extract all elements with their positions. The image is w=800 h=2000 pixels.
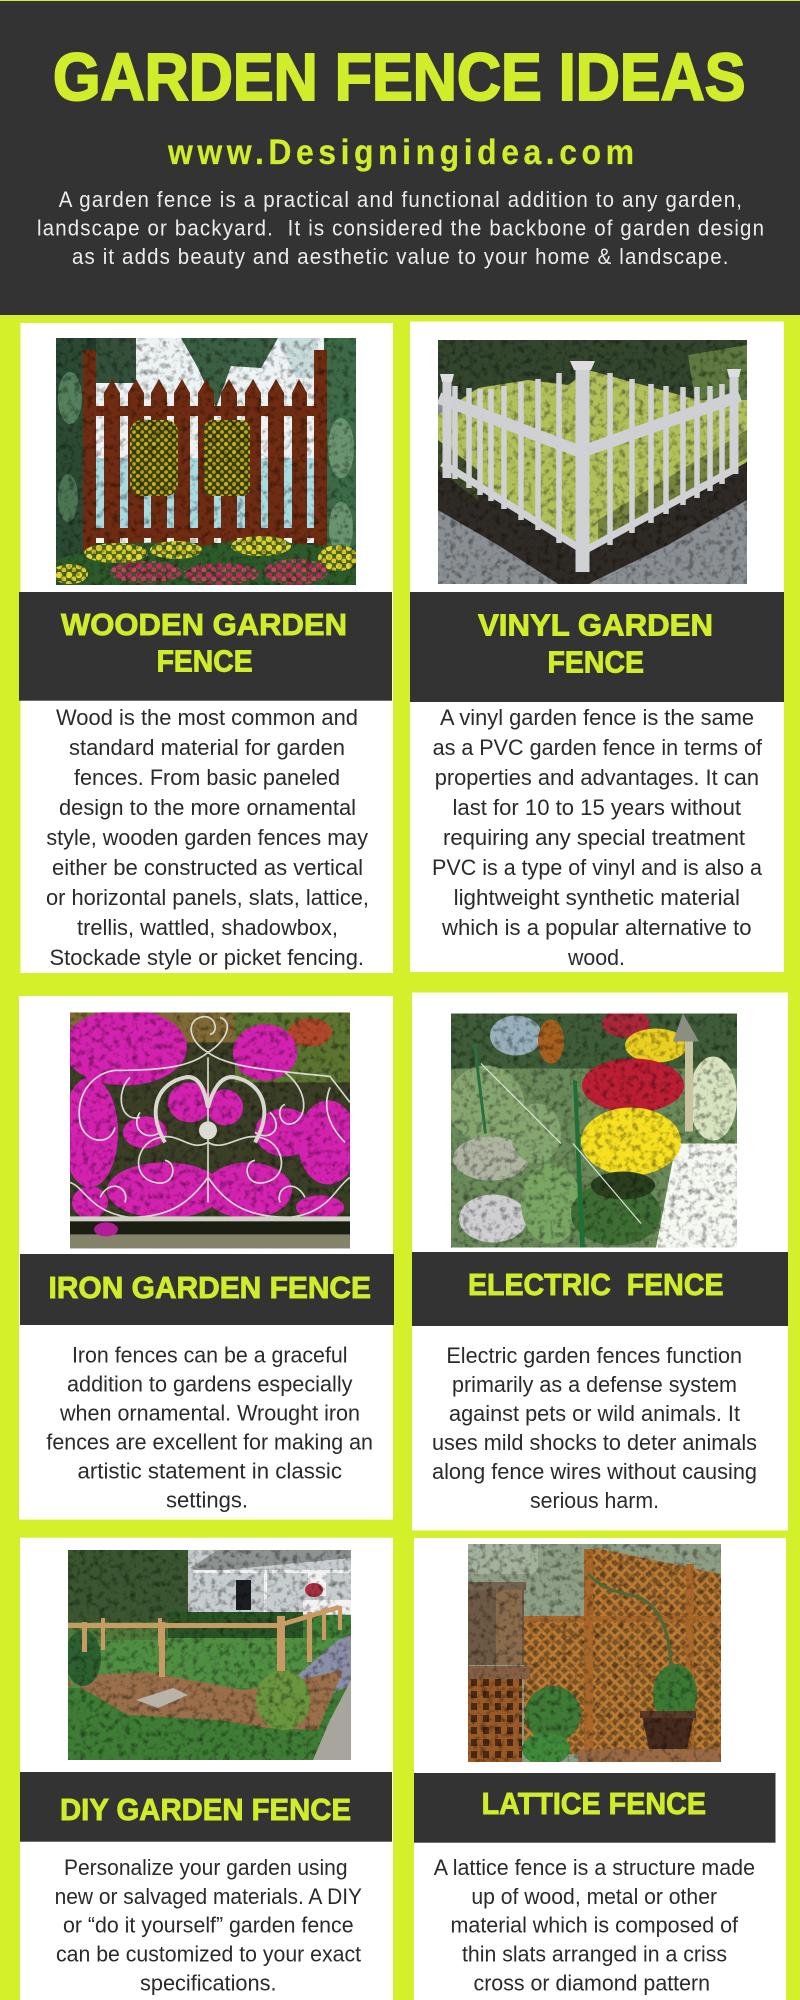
description: up of wood, metal or other [471,1884,717,1909]
description: serious harm. [530,1488,659,1513]
description: either be constructed as vertical [52,855,363,880]
description [55,1855,362,1996]
heading band: FENCE [548,644,644,679]
heading band [20,1254,394,1325]
heading band: FENCE [157,644,253,679]
description: A vinyl garden fence is the same [440,705,754,730]
description: trellis, wattled, shadowbox, [77,915,338,940]
photo: wooden picket fence [56,338,356,585]
photo: white vinyl corner fence [438,340,747,584]
photo: electric fence in flower garden [451,1014,737,1248]
description: requiring any special treatment [443,825,745,850]
description: or “do it yourself” garden fence [63,1913,354,1938]
heading band: VINYL GARDEN [478,608,713,643]
description: new or salvaged materials. A DIY [55,1884,362,1909]
description: cross or diamond pattern [474,1971,710,1996]
heading band: LATTICE FENCE [482,1786,706,1821]
website url: www.Designingidea.com [167,132,634,172]
description: Personalize your garden using [64,1855,348,1880]
description: uses mild shocks to deter animals [432,1430,757,1455]
description: design to the more ornamental [59,795,356,820]
photo: diy post and rail fence [68,1550,351,1760]
panel: electric fence [412,992,788,1530]
title: GARDEN FENCE IDEAS [53,40,746,115]
description [432,1343,757,1513]
description: fences are excellent for making an [46,1430,373,1454]
description: material which is composed of [450,1913,739,1938]
description: can be customized to your exact [56,1942,361,1967]
description: primarily as a defense system [452,1372,737,1397]
description: against pets or wild animals. It [449,1401,740,1426]
description [434,1855,755,1996]
panel: wooden garden fence [19,323,393,973]
intro paragraph: landscape or backyard. It is considered the backbone of garden design [37,216,764,241]
description: properties and advantages. It can [435,765,759,790]
description [432,705,763,970]
photo: ornamental iron fence with pink flowers [70,1012,350,1248]
intro paragraph: A garden fence is a practical and functional addition to any garden, [59,187,742,212]
panel: diy garden fence [20,1538,393,2000]
description: wood. [567,945,625,970]
description: specifications. [140,1971,276,1996]
description: artistic statement in classic [78,1459,342,1484]
panel: iron garden fence [19,996,394,1520]
intro paragraph: as it adds beauty and aesthetic value to your home & landscape. [72,244,728,269]
panel: vinyl garden fence [410,322,784,972]
description: standard material for garden [69,735,345,760]
heading band [410,592,784,702]
photo: wooden lattice fence [468,1544,721,1762]
heading band [412,1252,788,1326]
heading band: WOODEN GARDEN [61,607,347,642]
description: thin slats arranged in a criss [462,1942,727,1967]
heading band [19,592,392,701]
intro paragraph [37,187,764,269]
description: as a PVC garden fence in terms of [433,735,763,760]
panel: lattice fence [414,1538,786,2000]
heading band: ELECTRIC FENCE [468,1267,724,1302]
heading band [414,1773,776,1843]
description: settings. [166,1487,248,1512]
description [46,705,369,970]
heading band [20,1772,392,1842]
heading band: IRON GARDEN FENCE [48,1270,371,1305]
description: addition to gardens especially [67,1372,352,1397]
heading band: DIY GARDEN FENCE [60,1792,351,1827]
description [46,1342,373,1512]
description: PVC is a type of vinyl and is also a [432,855,763,880]
description: fences. From basic paneled [74,765,340,790]
description: Iron fences can be a graceful [72,1342,348,1368]
description: when ornamental. Wrought iron [59,1401,360,1426]
description: lightweight synthetic material [454,885,740,910]
description: last for 10 to 15 years without [452,795,741,820]
description: which is a popular alternative to [441,915,752,940]
description: A lattice fence is a structure made [434,1855,755,1880]
description: Electric garden fences function [446,1343,742,1368]
description: along fence wires without causing [432,1459,757,1484]
description: Wood is the most common and [56,705,358,730]
description: or horizontal panels, slats, lattice, [46,885,369,910]
description: Stockade style or picket fencing. [50,945,364,970]
description: style, wooden garden fences may [46,825,368,850]
header panel [0,1,800,315]
